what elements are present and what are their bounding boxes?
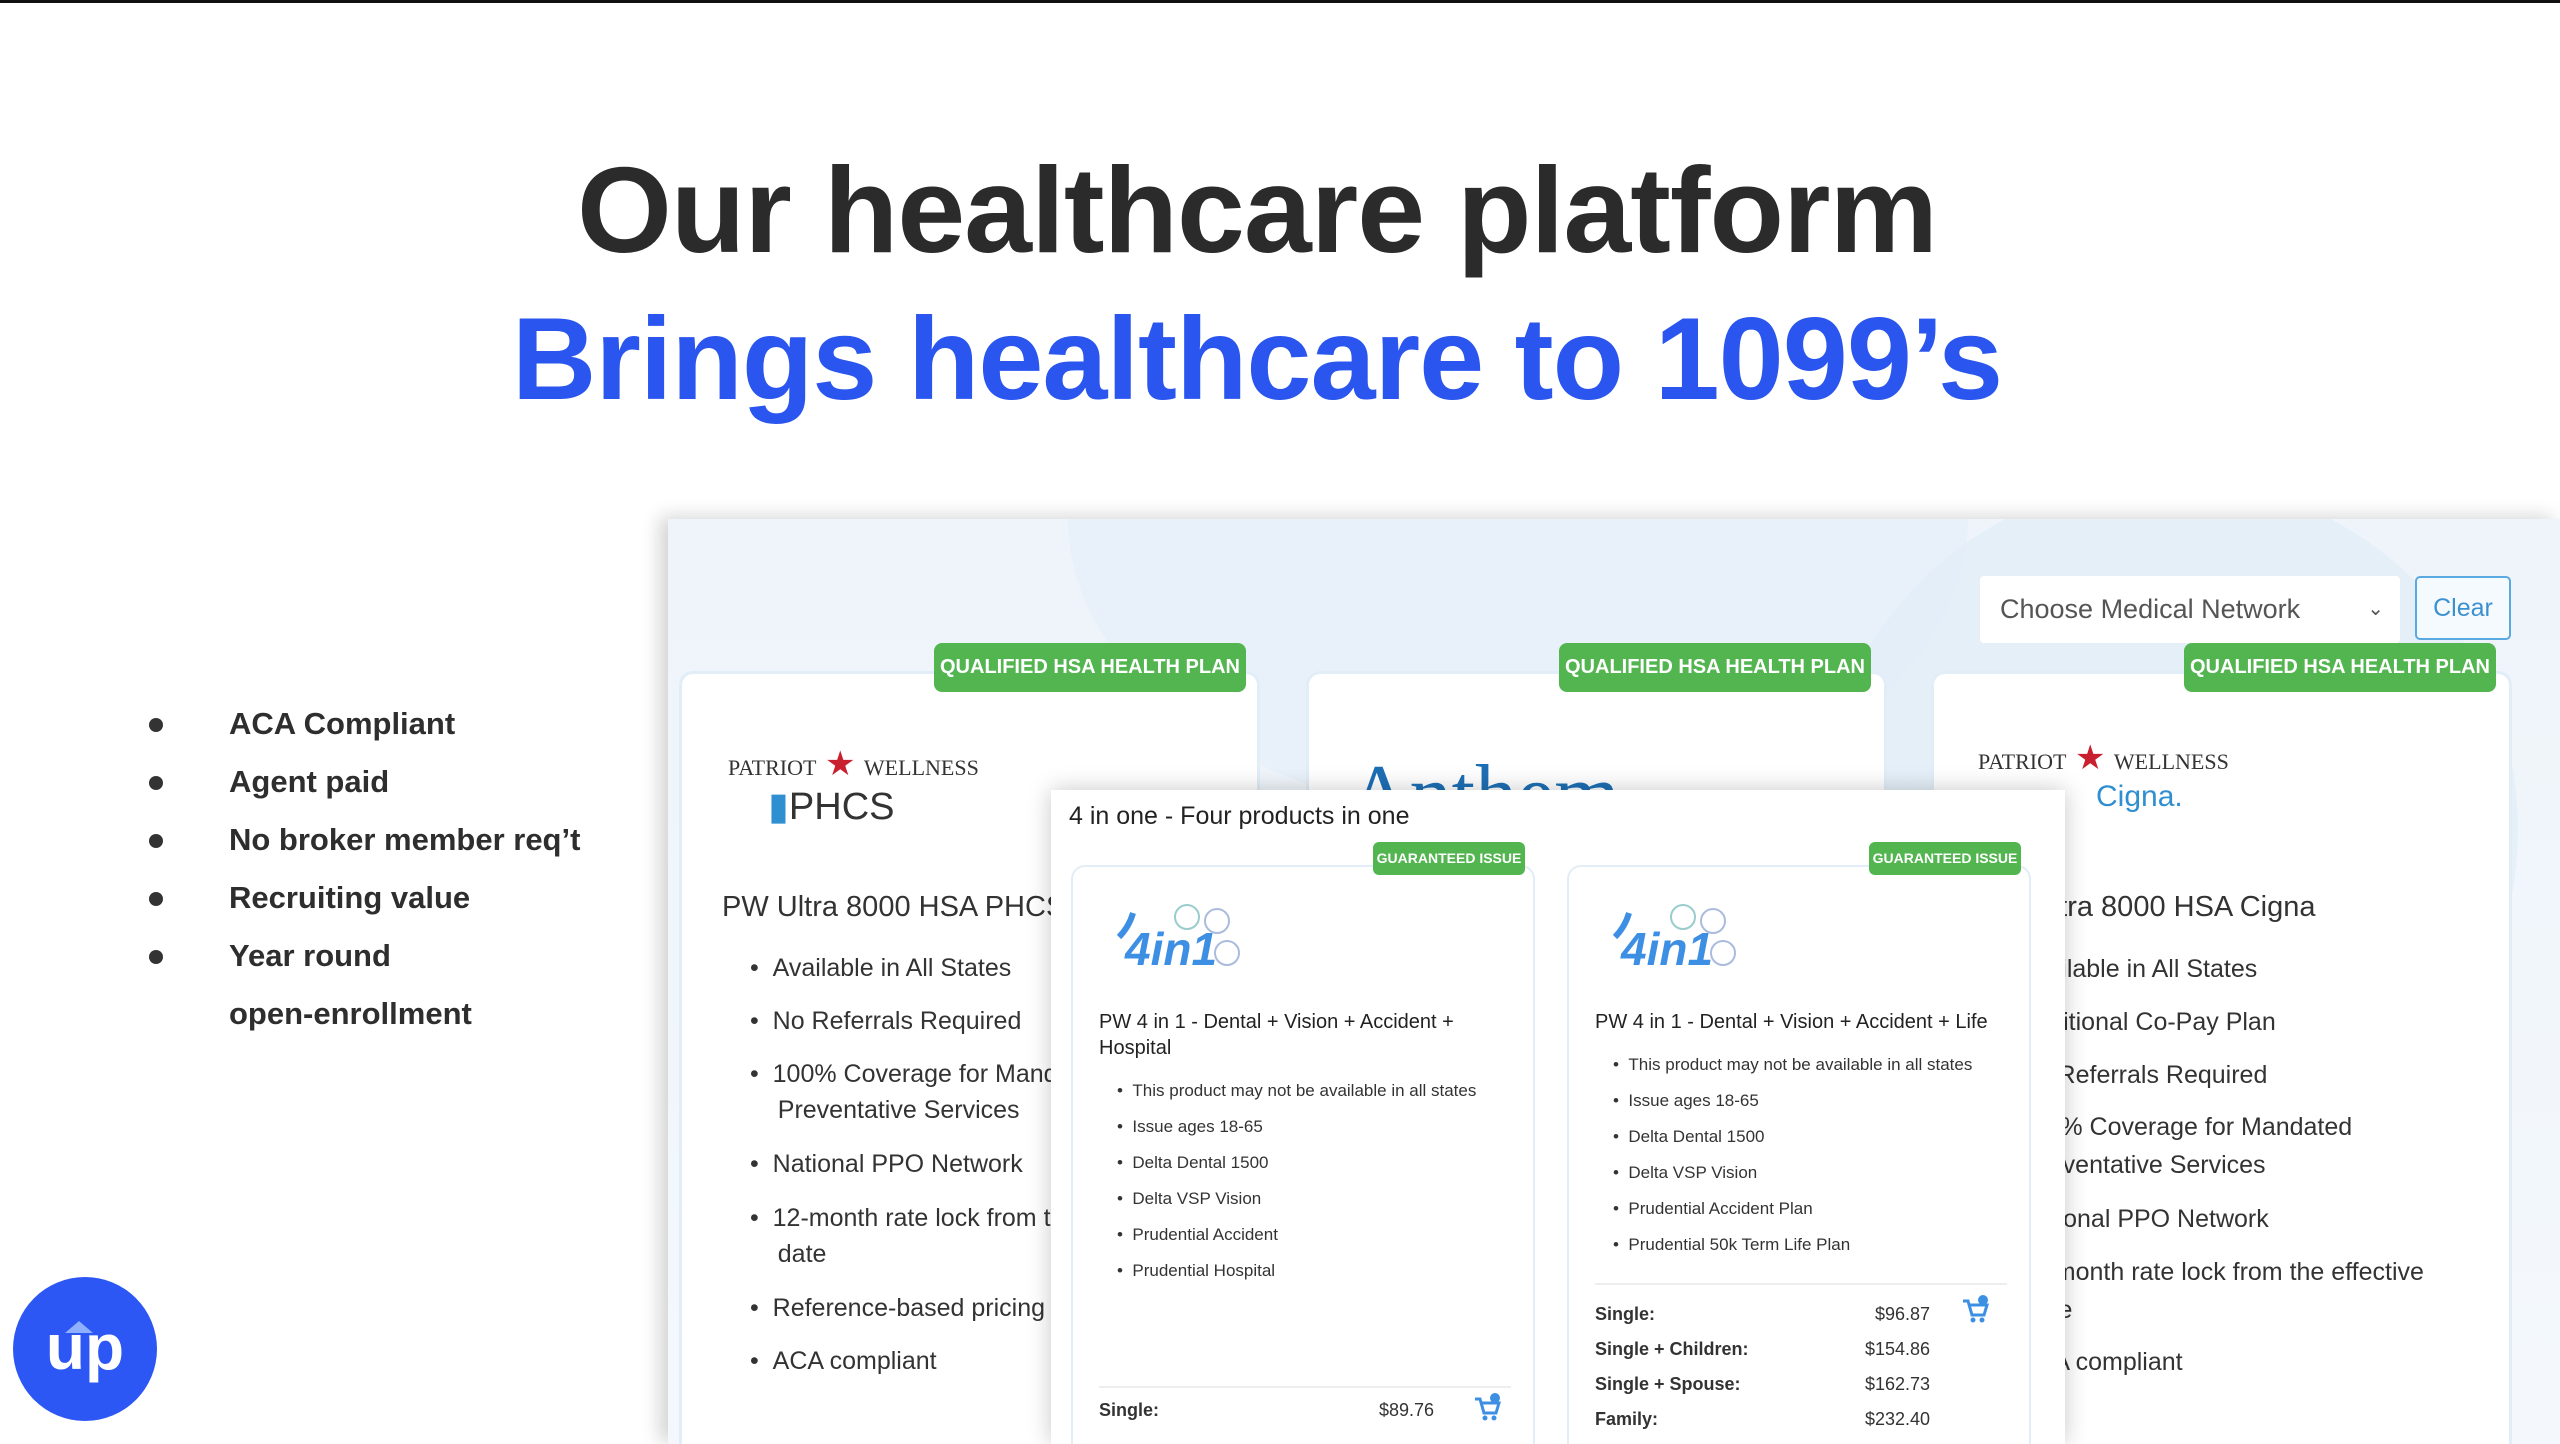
price table: $162.73 [1865, 1374, 1930, 1394]
product bullets: • Delta VSP Vision [1613, 1163, 1757, 1182]
logo: Patriot Wellness Cigna: Cigna. [2096, 780, 2183, 813]
product bullets: • Prudential Accident Plan [1613, 1199, 1813, 1218]
title: Our healthcare platform [577, 142, 1937, 278]
card title: PW Ultra 8000 HSA PHCS [722, 891, 1065, 923]
bullet list: No broker member req’t [229, 822, 580, 857]
logo: Patriot Wellness PHCS: PATRIOT ★ WELLNESS [728, 746, 979, 783]
price table: Single + Children: [1595, 1339, 1749, 1359]
icon: 4in1 logo [1116, 904, 1240, 975]
product bullets: • Delta Dental 1500 [1117, 1153, 1268, 1172]
product bullets: • This product may not be available in all states [1613, 1055, 1972, 1074]
product bullets [1613, 1055, 1972, 1254]
card: PHCS plan: • 12-month rate lock from the effective [750, 1204, 1178, 1232]
icon: cart [1475, 1393, 1501, 1420]
logo: Anthem: Anthem [1349, 748, 1620, 841]
card: PHCS plan: • National PPO Network [750, 1150, 1023, 1178]
dropdown: ⌄ [2367, 598, 2384, 620]
product bullets: • Issue ages 18-65 [1117, 1117, 1263, 1136]
product title: PW 4 in 1 - Dental + Vision + Accident + Life [1595, 1011, 1988, 1033]
badge: QUALIFIED HSA HEALTH PLAN [2190, 656, 2490, 678]
icon: 4in1 logo: 4in1 [1620, 923, 1713, 975]
card: Cigna plan: date [2024, 1296, 2072, 1324]
badge [1373, 842, 1525, 875]
card: PHCS plan: • Reference-based pricing [750, 1294, 1045, 1322]
card: PHCS plan: • 100% Coverage for Mandated [750, 1060, 1106, 1088]
product bullets: • Prudential Accident [1117, 1225, 1278, 1244]
card: Cigna plan: • 100% Coverage for Mandated [1996, 1113, 2352, 1141]
card: PHCS plan [679, 671, 1260, 1444]
product title: Hospital [1099, 1037, 1171, 1059]
dropdown: Choose Medical Network [2000, 594, 2300, 624]
logo: Patriot Wellness PHCS [728, 746, 979, 828]
logo: Patriot Wellness PHCS: ▮PHCS [768, 786, 894, 828]
price table: $96.87 [1875, 1304, 1930, 1324]
card: Cigna plan: • ACA compliant [1996, 1348, 2183, 1376]
product bullets: • Prudential 50k Term Life Plan [1613, 1235, 1850, 1254]
bullet list: Year round [229, 938, 391, 973]
bullet list: Recruiting value [229, 880, 470, 915]
logo: Patriot Wellness Cigna: PATRIOT ★ WELLNESS [1978, 740, 2229, 777]
product bullets: • This product may not be available in all states [1117, 1081, 1476, 1100]
clear button: Clear [2433, 594, 2493, 622]
badge [934, 643, 1246, 692]
price table: Family: [1595, 1409, 1658, 1429]
product title [1099, 1011, 1454, 1059]
product bullets: • Prudential Hospital [1117, 1261, 1275, 1280]
subtitle: Brings healthcare to 1099’s [512, 293, 2002, 424]
icon: up logo [13, 1277, 157, 1421]
panel: 4 in one modal [1051, 790, 2065, 1444]
badge: GUARANTEED ISSUE [1873, 850, 2017, 866]
card: Cigna plan: • Additional Co-Pay Plan [1996, 1008, 2276, 1036]
card: Cigna plan: Preventative Services [2024, 1151, 2266, 1179]
price row: Single: [1099, 1400, 1159, 1420]
card: Cigna plan [1931, 671, 2512, 1444]
badge: GUARANTEED ISSUE [1377, 850, 1521, 866]
bullet list: ACA Compliant [229, 706, 455, 741]
card: PHCS plan: • No Referrals Required [750, 1007, 1021, 1035]
product bullets: • Issue ages 18-65 [1613, 1091, 1759, 1110]
card: Cigna plan: • 12-month rate lock from the effective [1996, 1258, 2424, 1286]
card: PHCS plan: • ACA compliant [750, 1347, 937, 1375]
product bullets: • Delta VSP Vision [1117, 1189, 1261, 1208]
panel: platform screenshot [668, 519, 2560, 1444]
card: PHCS plan: • Available in All States [750, 954, 1011, 982]
price table: $232.40 [1865, 1409, 1930, 1429]
card: Anthem plan [1306, 671, 1887, 1444]
badge [2184, 643, 2496, 692]
price table: Single + Spouse: [1595, 1374, 1741, 1394]
card: PHCS plan: Preventative Services [778, 1096, 1020, 1124]
card: Cigna plan: • National PPO Network [1996, 1205, 2269, 1233]
icon: up logo: up [46, 1311, 124, 1383]
logo: Patriot Wellness Cigna [1978, 740, 2229, 813]
card: dental vision accident hospital [1071, 865, 1535, 1444]
badge [1559, 643, 1871, 692]
card: Cigna plan: • No Referrals Required [1996, 1061, 2267, 1089]
dropdown [1980, 576, 2400, 643]
card title: PW Ultra 8000 HSA Cigna [1977, 891, 2315, 923]
bullet list: open-enrollment [229, 996, 472, 1031]
clear button [2415, 576, 2511, 640]
card: dental vision accident hospital: $89.76 [1379, 1400, 1434, 1420]
bullet list [1996, 955, 2424, 1376]
modal heading: 4 in one - Four products in one [1069, 802, 1409, 830]
icon: 4in1 logo [1612, 904, 1736, 975]
badge: QUALIFIED HSA HEALTH PLAN [1565, 656, 1865, 678]
product title: PW 4 in 1 - Dental + Vision + Accident + [1099, 1011, 1454, 1033]
price table [1595, 1304, 1930, 1429]
badge [1869, 842, 2021, 875]
bullet list [149, 706, 580, 1031]
bullet list [750, 954, 1178, 1375]
card: PHCS plan: date [778, 1240, 826, 1268]
product bullets [1117, 1081, 1476, 1280]
card: dental vision accident life [1567, 865, 2031, 1444]
icon: cart [1963, 1295, 1989, 1322]
price table: Single: [1595, 1304, 1655, 1324]
icon: 4in1 logo: 4in1 [1124, 923, 1217, 975]
bullet list: Agent paid [229, 764, 389, 799]
product bullets: • Delta Dental 1500 [1613, 1127, 1764, 1146]
card: Cigna plan: • Available in All States [1996, 955, 2257, 983]
badge: QUALIFIED HSA HEALTH PLAN [940, 656, 1240, 678]
price table: $154.86 [1865, 1339, 1930, 1359]
